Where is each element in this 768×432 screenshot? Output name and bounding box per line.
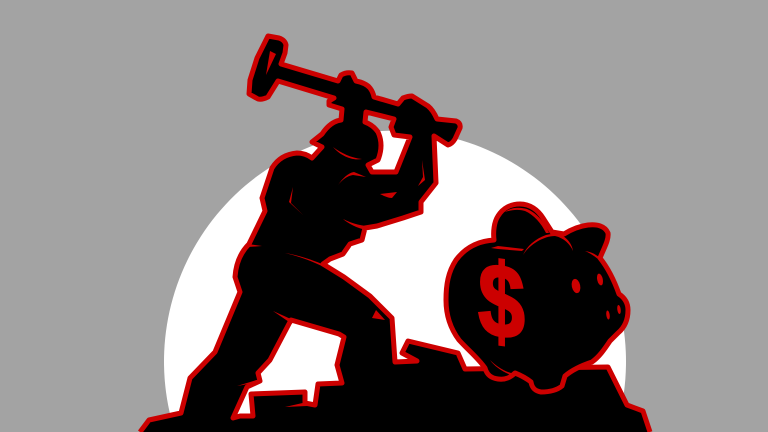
ear line [585,251,601,259]
head ridge [523,233,573,255]
thigh underside highlight [273,311,293,324]
belly line [490,360,515,376]
helmet brim highlight [333,147,362,159]
arm underside highlight [343,219,378,230]
step highlight [285,402,307,407]
worker with hammer and ground silhouette [140,36,650,432]
bicep highlight [338,172,366,185]
wrist highlight [418,160,425,186]
coin slot [491,246,524,251]
white circle [164,131,626,432]
piggy bank [446,204,628,392]
right nostril [617,305,621,314]
knee highlight [372,310,385,320]
chest highlight [289,187,303,215]
hip highlight [285,253,326,268]
left nostril [606,310,610,320]
hammer head highlight [266,51,276,75]
dollar sign: $ [478,241,525,363]
forearm highlight [380,192,397,198]
piggy body outline [446,204,628,392]
left eye [570,278,582,294]
foot highlight [237,379,260,386]
right eye [596,273,604,286]
coin arc [505,208,549,233]
waist highlight [248,244,262,247]
